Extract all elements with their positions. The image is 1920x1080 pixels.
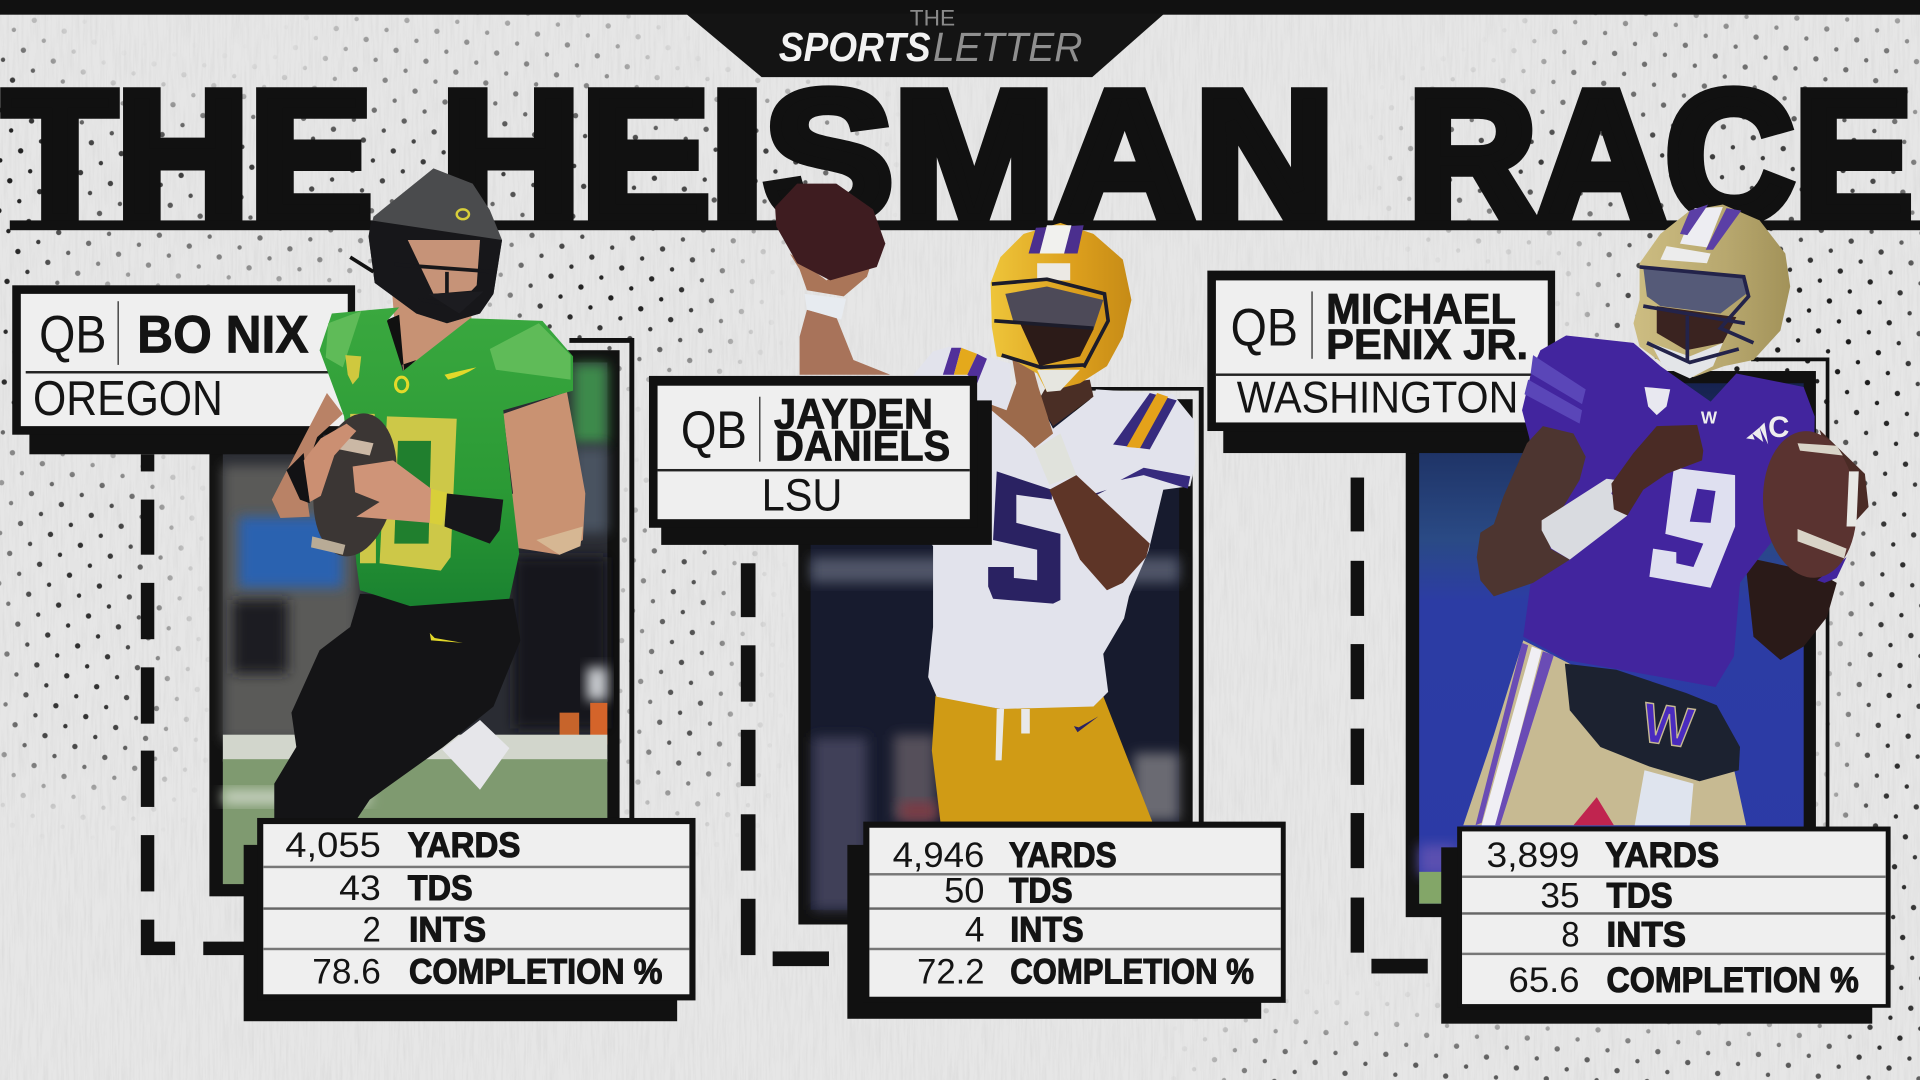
name: MICHAEL (1326, 285, 1516, 333)
title: the heisman race: HEISMAN (441, 53, 1335, 258)
wrist band (804, 294, 846, 320)
drawstrings (996, 709, 1030, 760)
stat: yards: 4,055 (285, 825, 381, 865)
stats: michael penix jr (1441, 827, 1891, 1024)
stat: completion (1509, 960, 1859, 1000)
right wristband (444, 493, 503, 544)
pants stripes (1476, 643, 1554, 825)
label: bo nix (12, 285, 355, 454)
stat: completion: COMPLETION % (1607, 960, 1859, 1000)
stats: jayden daniels (847, 822, 1286, 1019)
forearm (1049, 475, 1150, 590)
number 5 (988, 471, 1060, 604)
name: PENIX JR. (1326, 321, 1528, 369)
position: QB (681, 401, 747, 460)
stat: completion (917, 951, 1254, 991)
throwing hand (790, 244, 876, 296)
facemask (1640, 267, 1753, 362)
w logo: W (1639, 690, 1698, 760)
yellow bands (430, 489, 449, 525)
left arm (272, 393, 343, 518)
stat: tds (339, 868, 473, 908)
sleeve stripes (943, 348, 1190, 489)
school: WASHINGTON (1237, 374, 1518, 423)
right fingers (1820, 430, 1869, 520)
stats: bo nix (244, 818, 696, 1021)
panel: jayden daniels photo (798, 387, 1204, 924)
tan pants (1463, 640, 1746, 825)
black pants (274, 594, 520, 822)
stat: ints: INTS (1010, 910, 1084, 950)
stat: yards: YARDS (408, 825, 520, 865)
name (774, 391, 950, 470)
pac-12 shield (1644, 387, 1670, 415)
conference patch (345, 355, 361, 384)
dashed line: jayden daniels (741, 563, 829, 966)
centre towel (1635, 770, 1693, 825)
dashed line: bo nix (141, 454, 245, 955)
label: jayden daniels (649, 376, 992, 545)
number 9 (1649, 468, 1735, 588)
pants swoosh (1074, 716, 1098, 732)
football (303, 407, 407, 563)
stat: ints (362, 910, 486, 950)
wrist tape (1542, 479, 1627, 560)
visor (1643, 267, 1746, 313)
stat: tds: 50 (944, 870, 984, 910)
facemask (992, 279, 1108, 367)
school: LSU (762, 470, 842, 521)
title: the heisman race: THE (4, 53, 372, 258)
stat: completion: 78.6 (312, 951, 381, 991)
player: bo nix (272, 168, 585, 822)
top bar and logo (0, 0, 1920, 77)
stat: completion (312, 951, 662, 991)
stat: completion: COMPLETION % (409, 951, 662, 991)
chin guard (1651, 343, 1723, 378)
right arm (490, 392, 585, 555)
stat: yards: YARDS (1605, 835, 1719, 875)
stat: yards: 4,946 (893, 835, 984, 875)
stat: tds: 35 (1540, 875, 1580, 915)
three stripes (1746, 422, 1768, 444)
chin guard (1037, 370, 1080, 392)
face (1657, 306, 1736, 350)
wrist tape (1035, 433, 1076, 485)
stat: yards (1487, 835, 1719, 875)
player: michael penix jr (1463, 204, 1869, 825)
chest w: W (1701, 408, 1718, 428)
name: BO NIX (137, 306, 309, 365)
helmet stripes (1029, 225, 1084, 280)
stat: tds: TDS (1607, 875, 1673, 915)
gold helmet (1633, 204, 1790, 377)
name: DANIELS (775, 422, 950, 470)
stat: tds: 43 (339, 868, 381, 908)
school: OREGON (33, 372, 223, 426)
stat: tds: TDS (408, 868, 473, 908)
logo text: sportsletter: SPORTS (779, 24, 931, 70)
position: QB (39, 306, 107, 365)
pants swoosh (430, 633, 463, 643)
title: the heisman race: RACE (1408, 53, 1913, 258)
football (775, 184, 885, 280)
position: QB (1231, 298, 1298, 357)
left wristband (287, 453, 310, 503)
stat: yards: 3,899 (1487, 835, 1580, 875)
swoosh (444, 367, 476, 380)
stat: ints: 2 (362, 910, 381, 950)
stat: yards (285, 825, 520, 865)
helmet stripes (1660, 204, 1741, 263)
left hand (304, 424, 356, 502)
label: michael penix jr (1207, 271, 1555, 453)
jersey o logo (396, 377, 408, 392)
visor (1005, 287, 1103, 329)
helmet o logo (457, 209, 469, 219)
gold helmet (991, 223, 1131, 392)
face (1020, 323, 1093, 366)
panel: michael penix jr photo (1406, 358, 1829, 917)
stat: ints: 4 (965, 910, 984, 950)
purple jersey (1522, 336, 1815, 687)
fanny pack (1565, 664, 1740, 781)
guide hand (980, 342, 1053, 448)
left arm (1477, 426, 1586, 596)
football (1757, 427, 1863, 582)
jersey swoosh (1078, 490, 1107, 500)
stat: tds (944, 870, 1073, 910)
jersey number 10 (350, 414, 457, 571)
right hand (353, 460, 431, 523)
helmet lower shell (369, 220, 502, 323)
shoulder stripes (1524, 355, 1586, 424)
stat: ints: 8 (1561, 915, 1580, 955)
title: the heisman race (4, 53, 1920, 258)
left hand (1611, 425, 1703, 516)
logo text: the: THE (910, 6, 955, 31)
dashed line: michael penix jr (1351, 478, 1428, 973)
helmet (369, 168, 502, 323)
neck (392, 288, 471, 373)
throwing arm (800, 310, 890, 375)
elbow tape (536, 527, 583, 555)
name: JAYDEN (774, 391, 933, 439)
stat: tds (1540, 875, 1673, 915)
sleeve cuff (1817, 557, 1847, 583)
stat: ints: INTS (1607, 915, 1686, 955)
shoulder pattern (326, 311, 571, 380)
gap between legs (1573, 797, 1614, 825)
stat: tds: TDS (1009, 870, 1073, 910)
stat: yards (893, 835, 1117, 875)
yellow pants (932, 693, 1152, 822)
stat: completion: COMPLETION % (1010, 951, 1254, 991)
white jersey (906, 347, 1195, 709)
neck (1038, 380, 1093, 426)
player: jayden daniels (775, 184, 1195, 822)
captain c: C (1768, 411, 1789, 444)
green jersey (320, 307, 573, 606)
name (1326, 285, 1528, 369)
right lower arm (1745, 557, 1837, 660)
stat: ints (1561, 915, 1686, 955)
panel: bo nix photo (209, 338, 634, 896)
face (408, 240, 480, 294)
stat: completion: 65.6 (1509, 960, 1580, 1000)
stat: ints: INTS (409, 910, 486, 950)
facemask (394, 264, 495, 306)
stat: yards: YARDS (1009, 835, 1117, 875)
logo text: sportsletter: LETTER (933, 24, 1082, 70)
towel (442, 720, 509, 790)
stat: ints (965, 910, 1084, 950)
stat: completion: 72.2 (917, 951, 984, 991)
